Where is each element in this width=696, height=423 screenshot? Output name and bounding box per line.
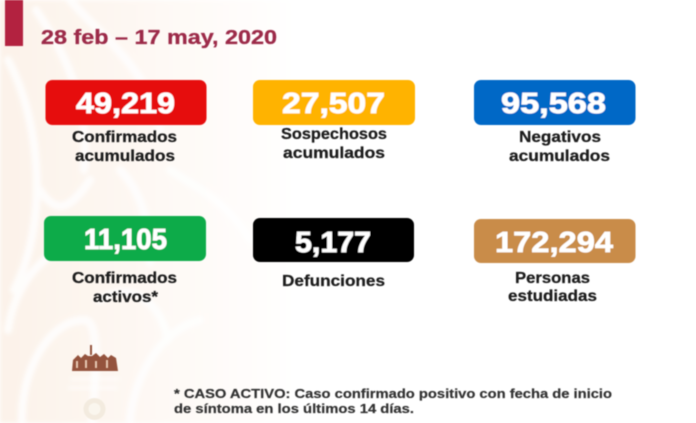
icon: government logo [68,345,120,420]
footnote: de síntoma en los últimos 14 días. [174,401,414,416]
stat: confirmados activos: activos* [93,289,159,306]
stat: defunciones: 5,177 [295,227,371,259]
title: 28 feb – 17 may, 2020 [41,26,277,49]
stat: negativos acumulados: 95,568 [501,88,606,120]
stat: personas estudiadas: Personas [515,270,590,287]
stat: personas estudiadas: estudiadas [508,288,597,305]
stat: sospechosos acumulados: Sospechosos [281,126,387,143]
stat: confirmados acumulados: 49,219 [76,88,175,120]
footnote: * CASO ACTIVO: Caso confirmado positivo con fecha de inicio [174,386,612,401]
stat: sospechosos acumulados [253,80,415,162]
stat: confirmados activos: Confirmados [72,270,177,287]
stat: negativos acumulados [474,80,636,165]
stat: personas estudiadas: 172,294 [495,227,613,259]
stat: personas estudiadas [474,219,636,305]
accent bar [5,0,23,46]
stat: confirmados activos [44,216,206,306]
footnote [174,386,612,416]
stat: negativos acumulados: Negativos [519,129,601,146]
stat: confirmados activos: 11,105 [84,224,167,256]
stat: defunciones [253,218,414,290]
stat: sospechosos acumulados: acumulados [283,145,385,162]
stat: sospechosos acumulados: 27,507 [282,88,385,120]
background pattern [0,0,300,423]
stat: defunciones: Defunciones [282,273,385,290]
stat: negativos acumulados: acumulados [509,148,610,165]
stat: confirmados acumulados [46,80,206,165]
stat: confirmados acumulados: Confirmados [72,129,177,146]
stat: confirmados acumulados: acumulados [75,148,175,165]
